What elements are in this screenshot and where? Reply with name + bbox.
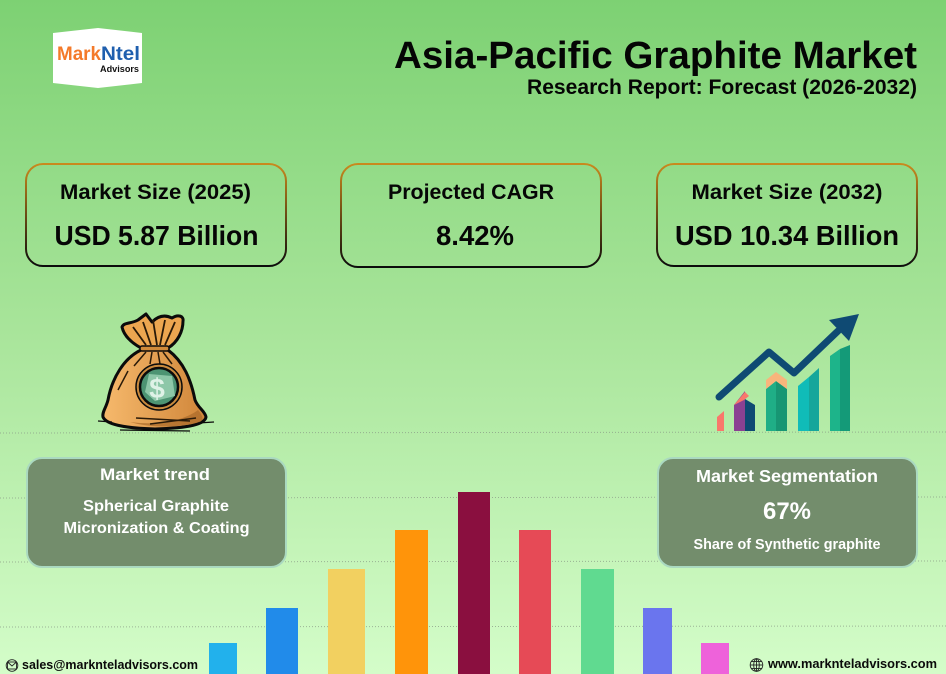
logo: MarkNtel Advisors: [53, 28, 142, 88]
title: Asia-Pacific Graphite Market: [394, 35, 917, 77]
stat card: market size 2032: Market Size (2032): [692, 180, 882, 204]
stat card: market size 2032: [657, 164, 917, 266]
panel: market trend: Micronization & Coating: [64, 520, 250, 537]
stat card: projected CAGR: Projected CAGR: [388, 180, 554, 204]
panel: market trend: [27, 458, 286, 567]
bar chart: [209, 492, 729, 674]
stat card: market size 2032: USD 10.34 Billion: [675, 220, 899, 251]
panel: market segmentation: 67%: [763, 498, 811, 525]
stat card: market size 2025: Market Size (2025): [60, 180, 251, 204]
panel: market segmentation: Share of Synthetic graphite: [694, 537, 880, 553]
stat card: market size 2025: USD 5.87 Billion: [54, 220, 258, 251]
icon: money bag: [98, 314, 214, 431]
logo: MarkNtel Advisors: Advisors: [100, 64, 139, 74]
email address: sales@marknteladvisors.com: [22, 657, 198, 672]
logo: MarkNtel Advisors: Ntel: [101, 44, 140, 65]
icon: envelope: [6, 660, 18, 671]
panel: market trend: Market trend: [100, 465, 210, 484]
panel: market segmentation: Market Segmentation: [696, 466, 878, 486]
subtitle: Research Report: Forecast (2026-2032): [527, 76, 917, 99]
stat card: projected CAGR: 8.42%: [436, 220, 514, 251]
website address: www.marknteladvisors.com: [767, 656, 937, 671]
stat card: projected CAGR: [341, 164, 601, 267]
panel: market segmentation: [658, 458, 917, 567]
logo: MarkNtel Advisors: Mark: [57, 44, 101, 65]
stat card: market size 2025: [26, 164, 286, 266]
icon: money bag: $: [149, 373, 165, 404]
panel: market trend: Spherical Graphite: [83, 498, 229, 515]
icon: growth chart with arrow: [717, 314, 859, 431]
icon: globe: [750, 659, 763, 671]
